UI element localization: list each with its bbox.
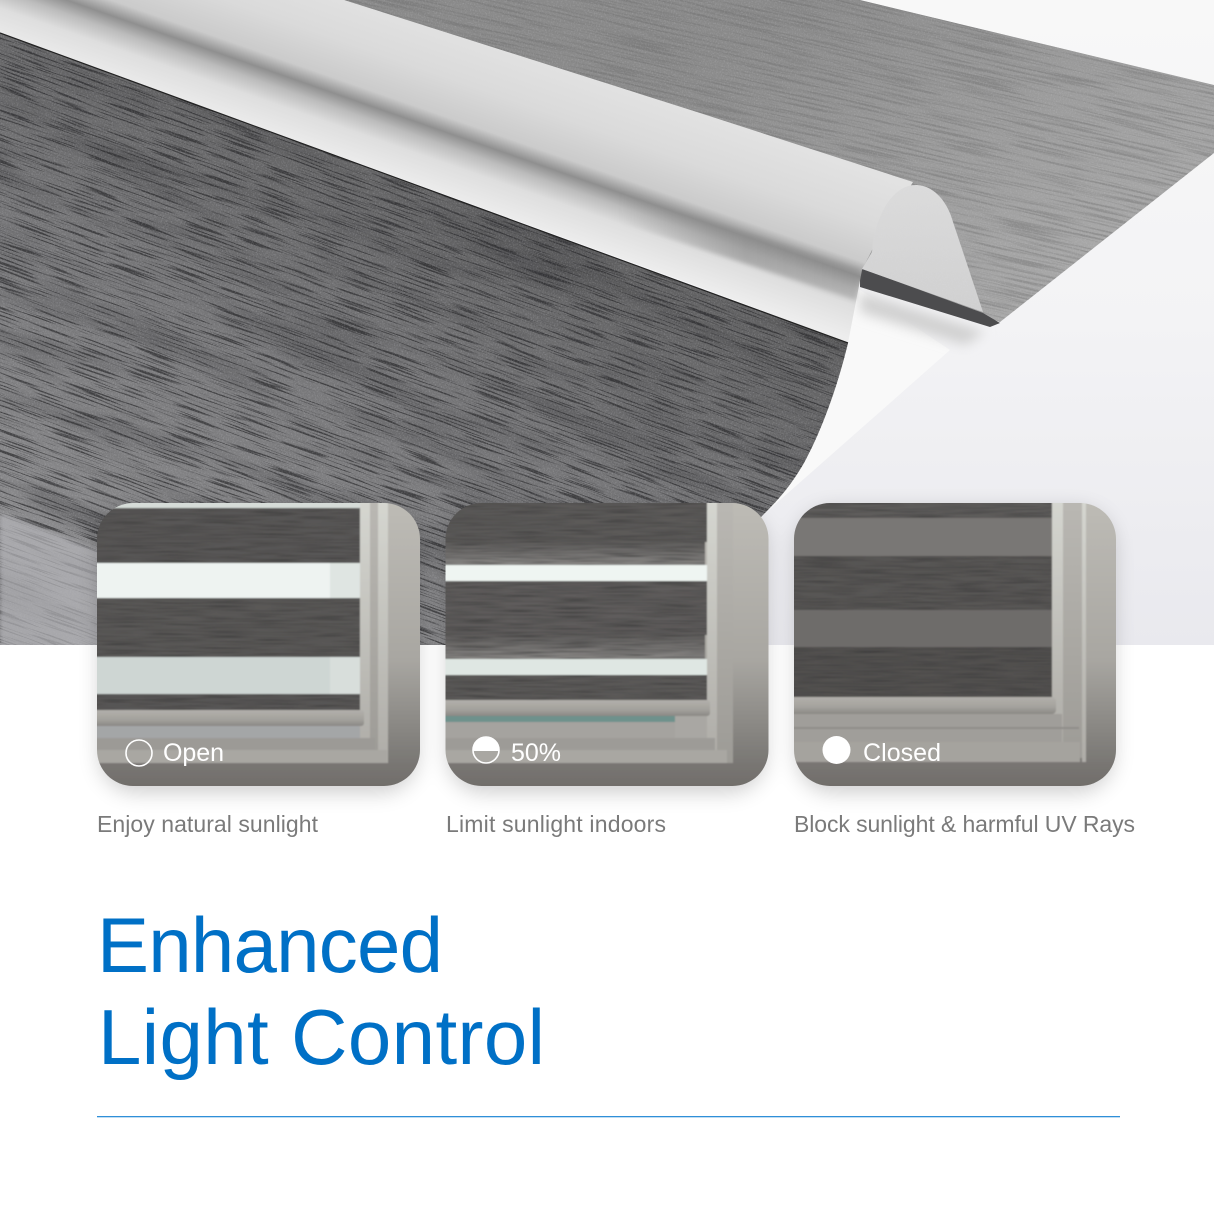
white surface crease: [640, 290, 950, 645]
photo: half open blind window: [438, 495, 776, 795]
front dark fabric panel: [0, 34, 848, 645]
sheer fabric curl: [862, 185, 983, 312]
title: Enhanced: [97, 901, 443, 989]
label: open: Open: [163, 739, 224, 767]
label: closed: Closed: [863, 739, 941, 767]
icon: filled circle: [822, 736, 850, 764]
sheer fabric layer over front panel: [0, 0, 913, 343]
card: 50 percent blind: [438, 495, 776, 795]
hero photo: rolled zebra blind fabric: [0, 0, 1214, 645]
title: [97, 901, 545, 1081]
dark underside of back fabric: [860, 268, 1000, 327]
icon: half circle: [472, 737, 500, 763]
card shadows: [100, 510, 1113, 792]
card: open blind: [90, 495, 427, 795]
shadow under back fabric: [860, 292, 985, 345]
card: closed blind: [787, 495, 1123, 795]
divider rule: [97, 1116, 1120, 1117]
icon: open circle: [126, 740, 152, 766]
dark fabric top edge: [0, 33, 848, 343]
caption: 50 percent: Limit sunlight indoors: [446, 811, 666, 837]
photo: open blind window: [90, 495, 427, 795]
title: Light Control: [98, 993, 545, 1081]
lighter fabric fold at lower left: [0, 512, 97, 645]
back fabric panel: [344, 0, 1214, 322]
label: 50%: 50%: [511, 739, 561, 767]
caption: closed: Block sunlight & harmful UV Rays: [794, 811, 1135, 837]
caption: open: Enjoy natural sunlight: [97, 811, 319, 837]
white page background below hero: [0, 645, 1214, 1214]
photo: closed blind window: [787, 495, 1123, 795]
